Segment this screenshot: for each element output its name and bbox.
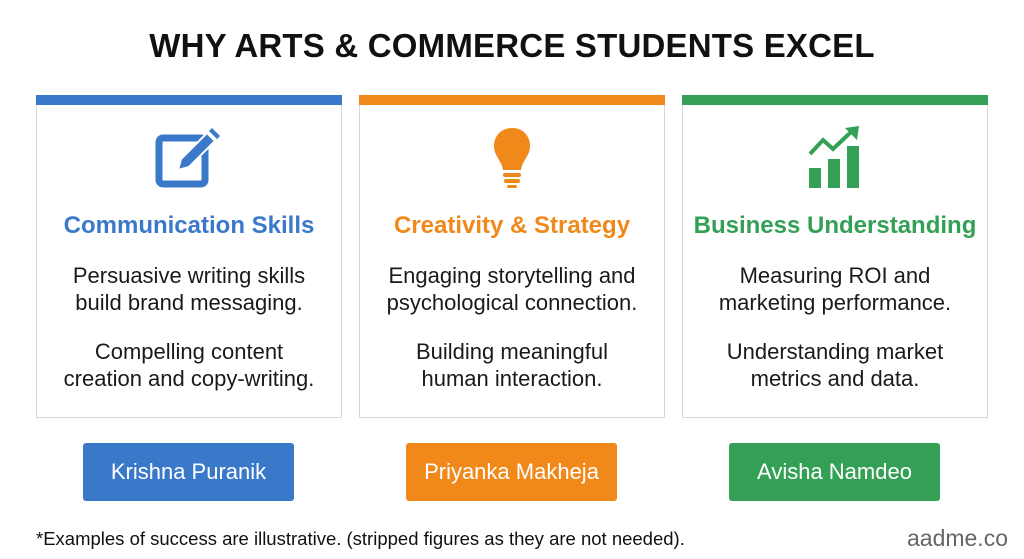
title: WHY ARTS & COMMERCE STUDENTS EXCEL [149, 27, 875, 64]
button: Krishna: Krishna Puranik [111, 459, 266, 484]
icon: edit [156, 128, 220, 188]
text [64, 339, 314, 391]
text: Engaging storytelling and [388, 263, 636, 288]
text: Measuring ROI and [740, 263, 930, 288]
text: human interaction. [422, 366, 602, 391]
panel: communication [36, 95, 342, 418]
heading: Communication Skills [64, 212, 314, 239]
button: Priyanka: Priyanka Makheja [424, 459, 599, 484]
brand: aadme.co [907, 525, 1008, 551]
text: build brand messaging. [75, 290, 303, 315]
text: marketing performance. [719, 290, 951, 315]
text [73, 263, 305, 315]
text: Building meaningful [416, 339, 608, 364]
text [727, 339, 944, 391]
heading: Creativity & Strategy [394, 212, 630, 239]
icon: bulb [494, 128, 530, 188]
text: Persuasive writing skills [73, 263, 305, 288]
text: creation and copy-writing. [64, 366, 314, 391]
footnote: *Examples of success are illustrative. (stripped figures as they are not needed). [36, 528, 685, 549]
button: Avisha: Avisha Namdeo [757, 459, 912, 484]
button: Krishna [83, 443, 294, 501]
text: metrics and data. [751, 366, 919, 391]
text [387, 263, 637, 315]
panel: business [682, 95, 988, 418]
text: Compelling content [95, 339, 283, 364]
text [416, 339, 608, 391]
panel: creativity [359, 95, 665, 418]
text: psychological connection. [387, 290, 637, 315]
icon: chart [808, 126, 859, 188]
heading: Business Understanding [694, 212, 976, 239]
text [719, 263, 951, 315]
button: Priyanka [406, 443, 617, 501]
button: Avisha [729, 443, 940, 501]
text: Understanding market [727, 339, 943, 364]
